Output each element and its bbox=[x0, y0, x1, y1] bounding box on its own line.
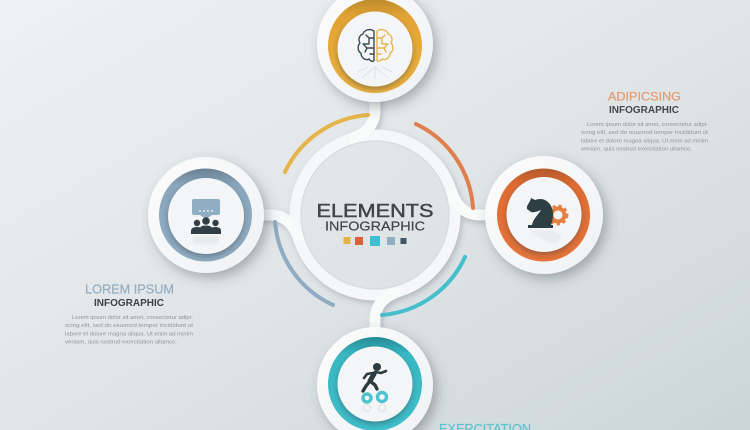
icon reflection bbox=[530, 230, 562, 244]
text block: adipicsing: Lorem ipsum dolor sit amet, consectetur adipi- bbox=[587, 122, 708, 128]
arc: yellow bbox=[285, 115, 368, 172]
center hub bbox=[255, 95, 495, 335]
icon: runner bbox=[363, 363, 386, 391]
title: ELEMENTS bbox=[316, 200, 434, 221]
icon: speech bubble bbox=[192, 199, 220, 219]
arc: orange bbox=[416, 124, 473, 208]
node: bottom runner bbox=[317, 327, 433, 430]
node: right knight bbox=[485, 156, 603, 274]
icon reflection bbox=[358, 66, 392, 79]
title: INFOGRAPHIC bbox=[325, 218, 425, 234]
text block: lorem ipsum: scing elit, sed do eiusmod tempor incididunt ut bbox=[65, 323, 193, 329]
text block: lorem ipsum: Lorem ipsum dolor sit amet, consectetur adipi- bbox=[72, 315, 193, 321]
text block: adipicsing: veniam, quis nostrud exercitation ullamco. bbox=[581, 146, 692, 152]
icon: people bbox=[191, 217, 221, 234]
text block: adipicsing bbox=[581, 92, 708, 152]
icon reflection bbox=[364, 404, 386, 412]
node: top brain bbox=[317, 0, 433, 102]
arc: blue bbox=[275, 222, 333, 305]
text block: adipicsing: ADIPICSING bbox=[608, 92, 681, 104]
icon: gear bbox=[549, 206, 567, 224]
icon: knight bbox=[527, 198, 553, 228]
title bbox=[316, 200, 434, 234]
text block: adipicsing: scing elit, sed do eiusmod tempor incididunt ut bbox=[581, 130, 708, 136]
icon: gears bbox=[363, 392, 386, 402]
text block: adipicsing: labore et dolore magna aliqua. Ut enim ad minim bbox=[581, 138, 708, 144]
text block: lorem ipsum: veniam, quis nostrud exercitation ullamco. bbox=[65, 340, 177, 346]
colour squares bbox=[344, 236, 406, 246]
icon reflection bbox=[193, 236, 219, 244]
text block: adipicsing: INFOGRAPHIC bbox=[609, 105, 679, 116]
text block: lorem ipsum: labore et dolore magna aliqua. Ut enim ad minim bbox=[65, 332, 193, 338]
hub white ring with connectors bbox=[255, 95, 495, 335]
text block: lorem ipsum: LOREM IPSUM bbox=[85, 282, 174, 296]
arc: teal bbox=[382, 257, 465, 315]
icon: brain bbox=[358, 30, 393, 61]
text block: lorem ipsum: INFOGRAPHIC bbox=[94, 298, 164, 309]
hub inner disc bbox=[301, 141, 449, 289]
text block: lorem ipsum bbox=[65, 282, 193, 346]
node: left people bbox=[148, 157, 264, 273]
